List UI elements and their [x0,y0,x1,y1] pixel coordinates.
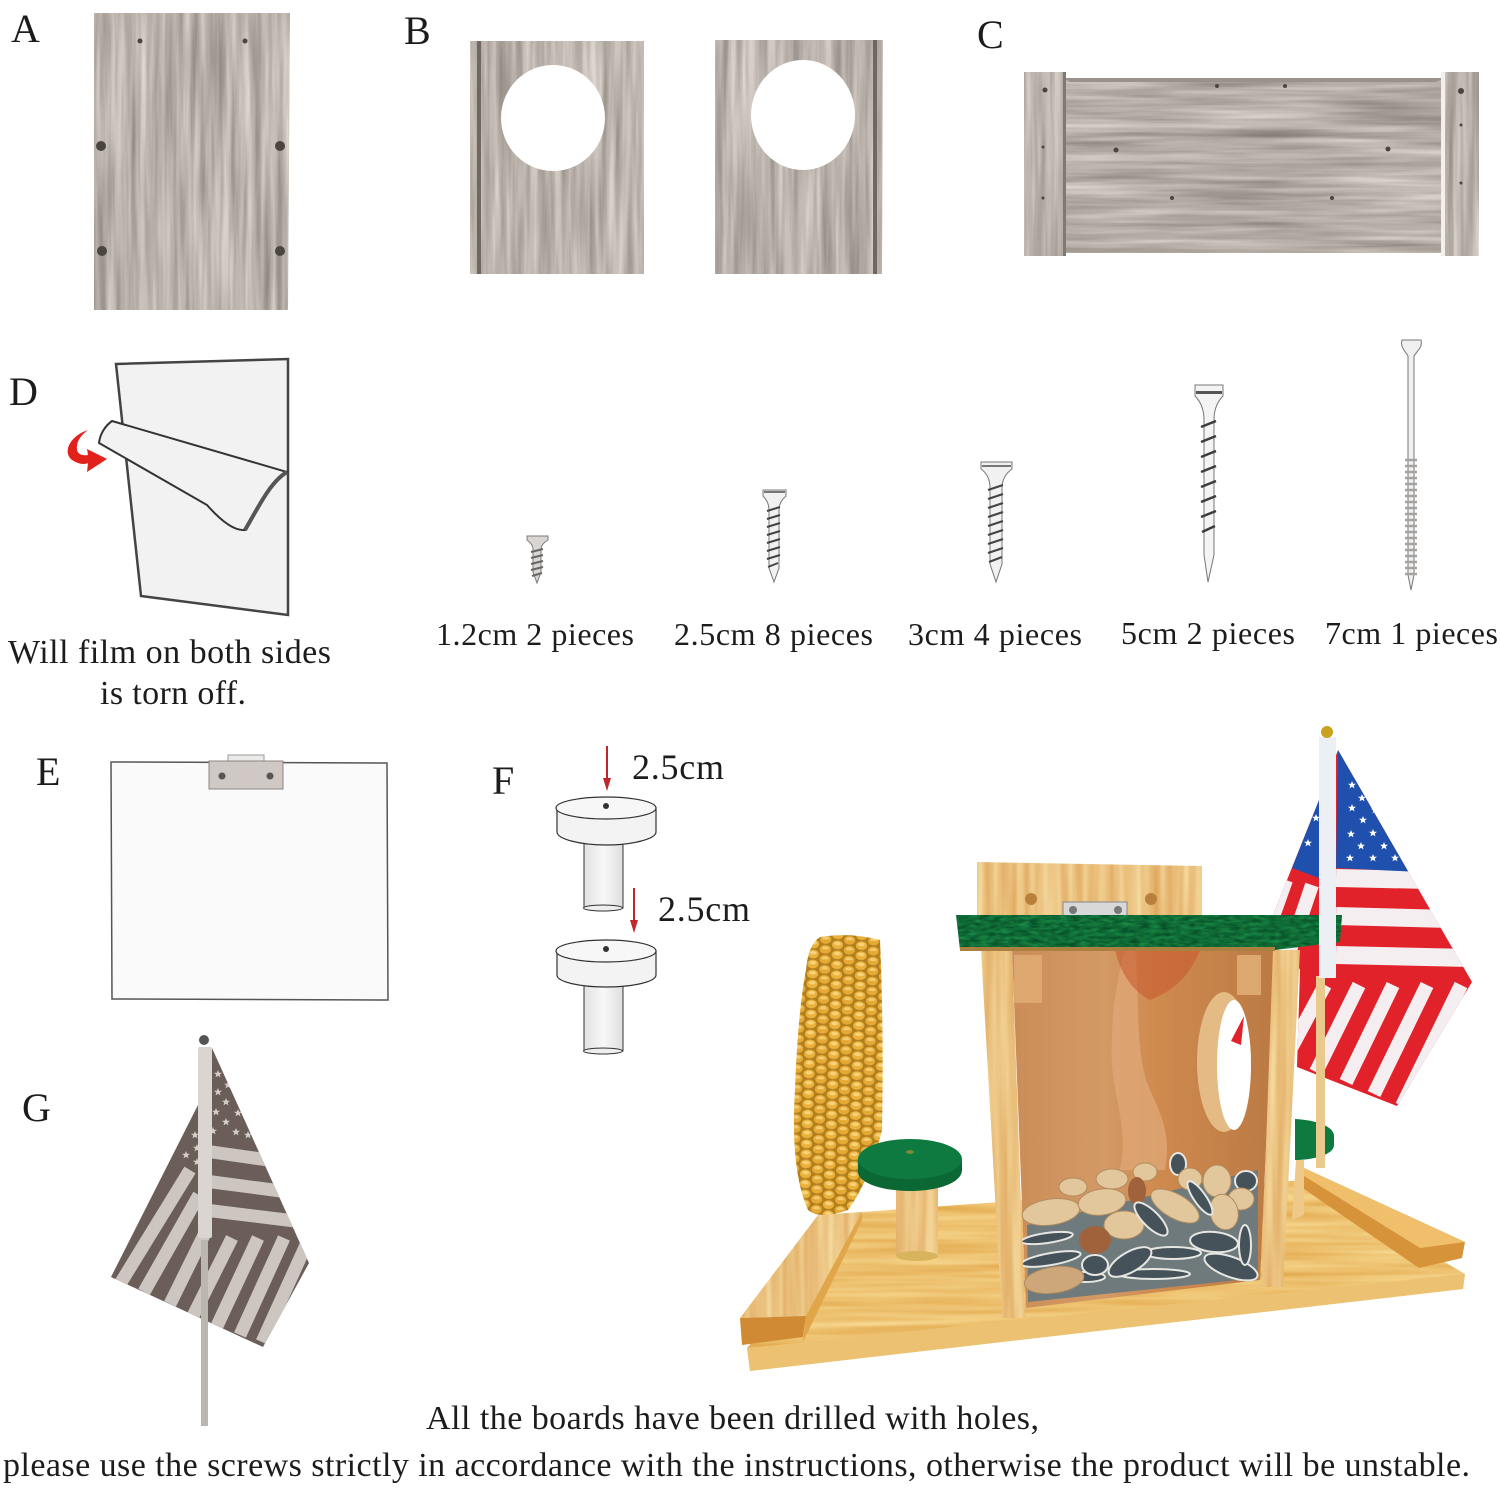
screw: 7cm [1402,340,1421,590]
screw size labels: 2.5cm 8 pieces [674,616,873,652]
red flag [1270,750,1472,1106]
seeds and peanuts pile [1020,1153,1261,1302]
feed hole [1197,992,1251,1132]
screw size labels: 3cm 4 pieces [908,616,1082,652]
left post [981,950,1025,1318]
dimension: lower perch 2.5cm: 2.5cm [658,889,750,929]
flag pole [1316,726,1336,1168]
caption: film removal note: Will film on both sides [8,634,331,671]
clear front window showing interior [1012,950,1275,1308]
label A: A [11,6,40,51]
green roof [956,915,1342,951]
perch peg, upper [556,797,656,911]
panel D: acrylic sheet with peeling film [99,359,288,615]
label B: B [404,8,431,53]
label D: D [9,369,38,414]
panel A: back wood board [94,13,290,310]
photo: assembled wooden feeder [740,726,1472,1371]
caption: film removal note: is torn off. [100,675,246,712]
panel B: right side board with round hole [715,40,883,274]
back board holes and hinge [1025,893,1157,916]
screw size labels: 7cm 1 pieces [1325,615,1498,651]
dimension: lower perch 2.5cm [630,888,750,933]
screw size labels: 5cm 2 pieces [1121,615,1295,651]
footer instruction note: please use the screws strictly in accordance with the instructions, otherwise the product will be unstable. [3,1447,1470,1484]
panel G: grayscale flag on pole [111,1035,309,1426]
icon: red curved peel arrow [68,430,107,472]
left green perch [858,1139,962,1261]
perch peg, lower [556,940,656,1054]
right green perch [1295,1119,1334,1160]
label G: G [22,1085,51,1130]
footer instruction note: All the boards have been drilled with holes, [426,1400,1039,1437]
back board above roof [977,862,1202,917]
left rail [740,1212,862,1345]
feeder base board [747,1180,1465,1371]
screw: 3cm [981,462,1012,582]
footer instruction note [3,1400,1470,1484]
screw size labels [436,615,1498,652]
screw: 5cm [1195,385,1223,582]
dimension: top perch 2.5cm [603,746,724,791]
side board behind right post [1292,1160,1304,1220]
screw: 2.5cm [763,490,786,582]
panel E: clear roof sheet with hinge [111,755,388,1000]
dimension: top perch 2.5cm: 2.5cm [632,747,724,787]
screw: 1.2cm [527,536,548,583]
label F: F [492,758,514,803]
label E: E [36,749,60,794]
caption: film removal note [8,634,331,712]
screw size labels: 1.2cm 2 pieces [436,616,634,652]
corn cob [794,935,883,1215]
panel B: left side board with round hole [470,41,644,274]
label C: C [977,12,1004,57]
right rail [1304,1168,1465,1268]
right post [1261,950,1300,1287]
panel C: tray wood board [1024,72,1479,256]
